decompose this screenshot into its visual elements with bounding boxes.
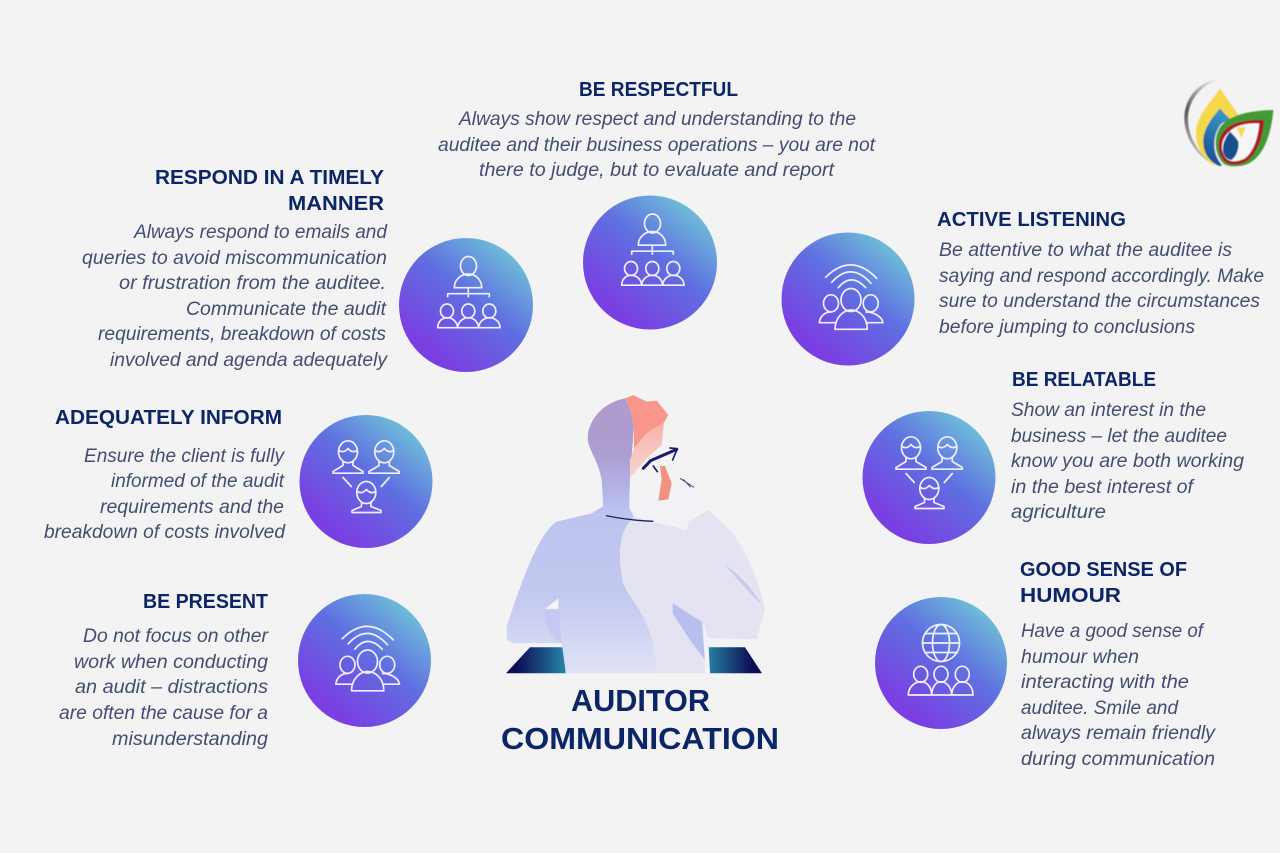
text block: in the best interest of bbox=[1011, 477, 1195, 498]
text block: there to judge, but to evaluate and report bbox=[479, 160, 835, 181]
text block bbox=[44, 446, 286, 543]
icon: hierarchy people bbox=[583, 196, 717, 330]
logo: yellow flame bbox=[1196, 88, 1245, 165]
panel: adequately inform bbox=[44, 406, 432, 548]
logo: red inner leaf bbox=[1218, 120, 1264, 165]
text block: Show an interest in the bbox=[1011, 400, 1206, 421]
text block: Ensure the client is fully bbox=[84, 446, 286, 467]
logo: leaf halo bbox=[1214, 117, 1246, 168]
inner arm shadow bbox=[545, 610, 562, 643]
desk left bbox=[506, 647, 566, 673]
panel: be relatable bbox=[862, 368, 1244, 544]
logo: yellow inner segment bbox=[1237, 127, 1245, 138]
heading: MANNER bbox=[288, 192, 384, 215]
logo bbox=[1184, 79, 1273, 168]
text block: queries to avoid miscommunication bbox=[82, 248, 387, 269]
text block: auditee. Smile and bbox=[1021, 698, 1179, 719]
icon: group with signal waves bbox=[782, 232, 914, 366]
text block bbox=[1021, 621, 1217, 770]
title: AUDITOR bbox=[571, 683, 710, 718]
text block: work when conducting bbox=[74, 652, 268, 673]
logo: grey crescent bbox=[1184, 79, 1218, 165]
text block: informed of the audit bbox=[111, 471, 285, 492]
panel: active listening bbox=[782, 208, 1264, 366]
heading: BE RESPECTFUL bbox=[579, 78, 738, 101]
text block bbox=[939, 240, 1264, 338]
text block: during communication bbox=[1021, 749, 1215, 770]
panel: be present bbox=[59, 590, 431, 750]
icon: three connected people bbox=[300, 415, 432, 548]
text block: misunderstanding bbox=[112, 729, 268, 750]
text block: Do not focus on other bbox=[83, 626, 269, 647]
text block: always remain friendly bbox=[1021, 723, 1217, 744]
torso highlight bbox=[703, 622, 710, 673]
arm gap bbox=[545, 598, 558, 609]
text block: requirements, breakdown of costs bbox=[98, 324, 387, 345]
text block bbox=[1011, 400, 1244, 523]
heading: BE PRESENT bbox=[143, 590, 268, 613]
text block: auditee and their business operations – you are not bbox=[438, 135, 876, 156]
logo: inner blue segment bbox=[1223, 132, 1239, 160]
hand lines bbox=[680, 478, 694, 487]
heading: ACTIVE LISTENING bbox=[937, 208, 1126, 231]
text block: involved and agenda adequately bbox=[110, 350, 389, 371]
hair bbox=[625, 395, 668, 448]
desk right bbox=[708, 647, 762, 673]
icon: group with signal waves bbox=[298, 594, 431, 727]
title bbox=[501, 683, 779, 756]
text block: saying and respond accordingly. Make bbox=[939, 266, 1264, 287]
title: COMMUNICATION bbox=[501, 721, 779, 756]
text block: an audit – distractions bbox=[75, 677, 269, 698]
body right and raised arm bbox=[620, 510, 765, 673]
text block: agriculture bbox=[1011, 502, 1106, 523]
text block: Have a good sense of bbox=[1021, 621, 1205, 642]
text block bbox=[59, 626, 269, 750]
text block: are often the cause for a bbox=[59, 703, 268, 724]
text block: breakdown of costs involved bbox=[44, 522, 286, 543]
text block: sure to understand the circumstances bbox=[939, 291, 1260, 312]
text block: Always respond to emails and bbox=[133, 222, 388, 243]
body left with arm bbox=[507, 506, 657, 673]
collar line bbox=[606, 516, 653, 521]
text block: requirements and the bbox=[100, 497, 284, 518]
text block: Be attentive to what the auditee is bbox=[939, 240, 1233, 261]
text block: Communicate the audit bbox=[186, 299, 387, 320]
text block: or frustration from the auditee. bbox=[119, 273, 386, 294]
panel: good sense of humour bbox=[875, 558, 1217, 770]
heading bbox=[155, 166, 384, 215]
panel: be respectful bbox=[438, 78, 876, 330]
heading: BE RELATABLE bbox=[1012, 368, 1156, 391]
heading: RESPOND IN A TIMELY bbox=[155, 166, 384, 189]
head back bbox=[588, 398, 634, 508]
text block: before jumping to conclusions bbox=[939, 317, 1196, 338]
logo: blue flame bbox=[1203, 108, 1241, 166]
text block: interacting with the bbox=[1021, 672, 1189, 693]
panel: respond in a timely manner bbox=[82, 166, 533, 372]
heading: HUMOUR bbox=[1020, 584, 1121, 607]
logo: white inner leaf bbox=[1222, 123, 1259, 161]
glasses bbox=[643, 448, 677, 472]
text block: Always show respect and understanding to the bbox=[458, 109, 856, 130]
sleeve shadow bbox=[673, 603, 705, 660]
heading: ADEQUATELY INFORM bbox=[55, 406, 282, 429]
text block: humour when bbox=[1021, 647, 1139, 668]
text block: know you are both working bbox=[1011, 451, 1244, 472]
illustration: auditor figure at desk bbox=[506, 395, 765, 673]
icon: hierarchy people bbox=[399, 238, 533, 372]
text block bbox=[82, 222, 389, 371]
sleeve crease bbox=[725, 565, 762, 605]
nose bbox=[658, 466, 672, 501]
hand bbox=[629, 480, 707, 530]
face bbox=[630, 423, 664, 478]
heading bbox=[1020, 558, 1187, 607]
icon: globe with people bbox=[875, 597, 1007, 729]
heading: GOOD SENSE OF bbox=[1020, 558, 1187, 581]
text block bbox=[438, 109, 876, 181]
logo: green leaf bbox=[1216, 110, 1273, 166]
text block: business – let the auditee bbox=[1011, 426, 1227, 447]
icon: three connected people bbox=[862, 411, 996, 544]
